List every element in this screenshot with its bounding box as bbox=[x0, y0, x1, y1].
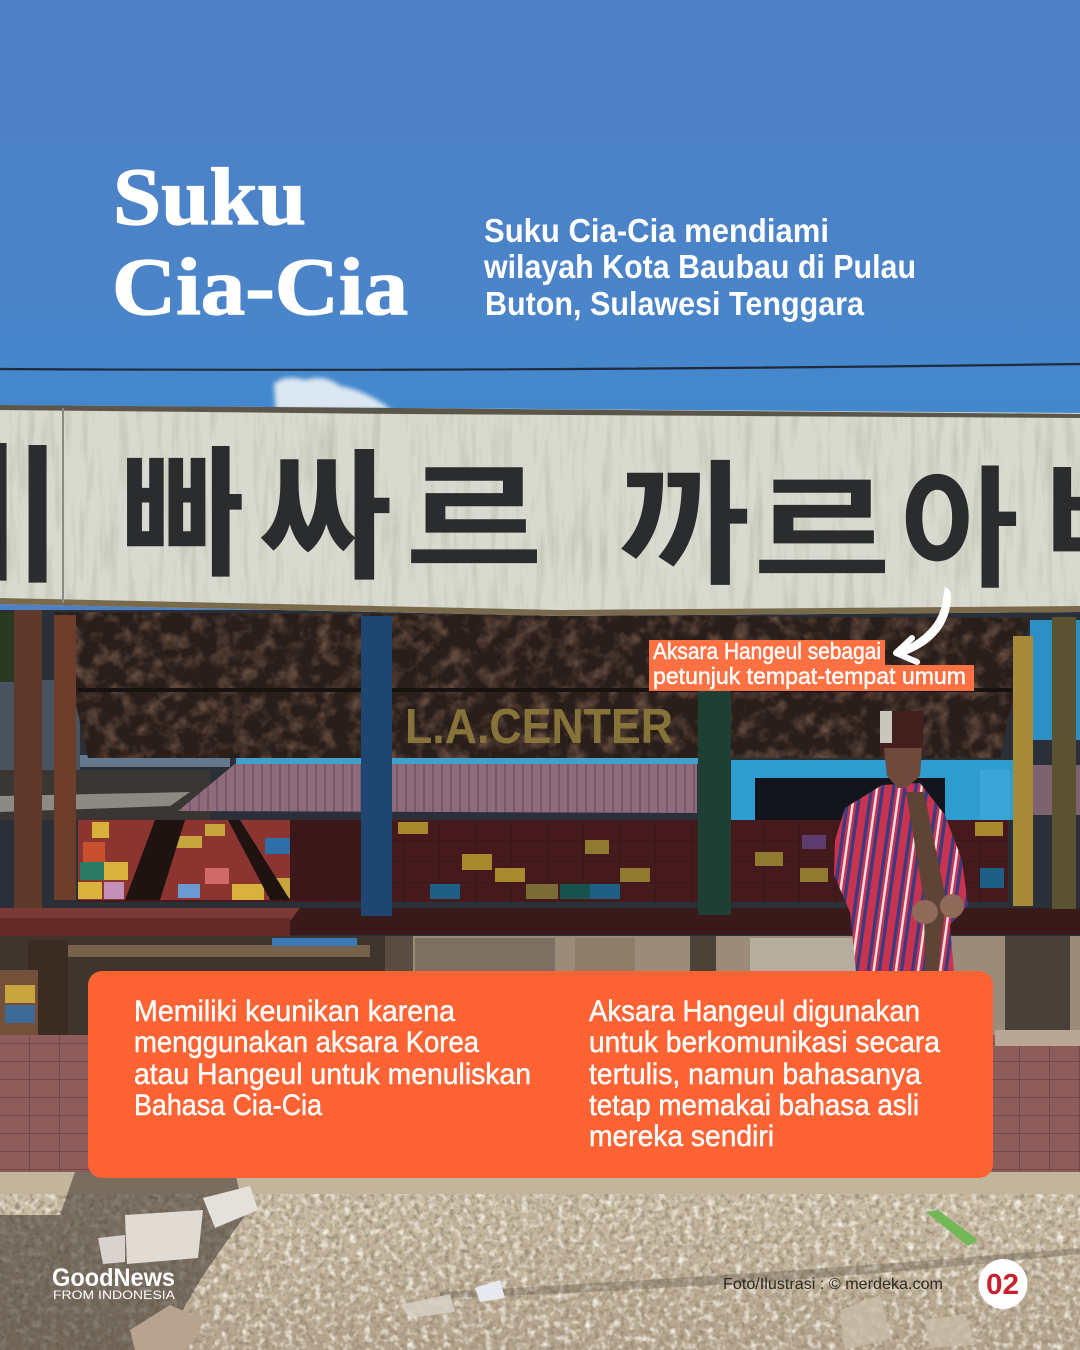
sign lettering bbox=[0, 433, 1080, 604]
callout: Hangeul signage bbox=[649, 638, 974, 691]
intro text: wilayah Kota Baubau di Pulau bbox=[483, 248, 916, 285]
dark roof under the sign bbox=[55, 612, 1030, 758]
pavement bbox=[0, 1035, 1080, 1175]
page number: 02 bbox=[986, 1269, 1019, 1301]
mauve roof bbox=[178, 763, 697, 813]
text: left column: menggunakan aksara Korea bbox=[134, 1026, 479, 1059]
text: left column: Bahasa Cia-Cia bbox=[134, 1089, 322, 1122]
text: left column: atau Hangeul untuk menuliskan bbox=[134, 1058, 531, 1091]
background photo: market shelter with Hangeul sign bbox=[0, 358, 1080, 1350]
shelter posts bbox=[14, 610, 42, 908]
sign lettering: 아 bbox=[900, 457, 1019, 604]
text: right column: tetap memakai bahasa asli bbox=[589, 1089, 919, 1122]
diagonal shelter shadows bbox=[125, 820, 185, 900]
cloud bbox=[274, 378, 392, 410]
hat bbox=[880, 711, 923, 753]
painted roof text: L.A.CENTER bbox=[405, 700, 673, 754]
text: right column: Aksara Hangeul digunakan bbox=[589, 995, 920, 1028]
text: right column bbox=[589, 995, 940, 1153]
photo credit: Foto/Ilustrasi : © merdeka.com bbox=[723, 1276, 943, 1293]
text: right column: tertulis, namun bahasanya bbox=[589, 1058, 921, 1091]
text: right column: mereka sendiri bbox=[589, 1120, 774, 1153]
face bbox=[884, 748, 922, 788]
power line bbox=[0, 364, 1080, 370]
logo: GoodNews from Indonesia: GoodNews bbox=[52, 1264, 175, 1292]
callout: Hangeul signage: Aksara Hangeul sebagai bbox=[653, 638, 881, 664]
Hangeul sign board bbox=[0, 405, 1080, 617]
logo: GoodNews from Indonesia: FROM INDONESIA bbox=[53, 1288, 175, 1302]
panel: orange explanation bbox=[88, 971, 993, 1178]
robe bbox=[834, 783, 968, 972]
under the platform bbox=[0, 936, 1080, 1036]
intro text bbox=[483, 212, 916, 322]
inner garment bbox=[906, 792, 946, 972]
title: Cia-Cia bbox=[112, 241, 408, 332]
shadow on ground bbox=[0, 1172, 245, 1350]
title: Suku bbox=[113, 151, 306, 242]
sign lettering: 까 bbox=[618, 451, 750, 602]
sign lettering: 르 bbox=[405, 452, 543, 592]
sky bbox=[0, 0, 1080, 420]
gravel ground bbox=[0, 1172, 1080, 1350]
colourful tiled wall bbox=[78, 820, 1008, 902]
man in striped robe bbox=[834, 711, 968, 972]
intro text: Suku Cia-Cia mendiami bbox=[484, 212, 829, 249]
intro text: Buton, Sulawesi Tenggara bbox=[485, 285, 865, 322]
sign lettering: 르 bbox=[753, 465, 891, 602]
blue building bbox=[730, 760, 1015, 820]
platform bbox=[0, 908, 300, 935]
hands bbox=[912, 900, 938, 924]
callout: Hangeul signage: petunjuk tempat-tempat umum bbox=[653, 663, 966, 689]
litter: boxes and bottle bbox=[125, 1210, 203, 1264]
text: left column: Memiliki keunikan karena bbox=[134, 995, 455, 1028]
text: right column: untuk berkomunikasi secara bbox=[589, 1026, 940, 1059]
sign lettering: 빠 bbox=[121, 437, 245, 595]
title bbox=[112, 151, 408, 332]
arrow: from sign to callout bbox=[896, 587, 951, 662]
text: left column bbox=[134, 995, 531, 1122]
market background behind the shelter bbox=[0, 610, 1080, 980]
page number bbox=[978, 1259, 1028, 1309]
sign lettering: 싸 bbox=[258, 440, 393, 597]
